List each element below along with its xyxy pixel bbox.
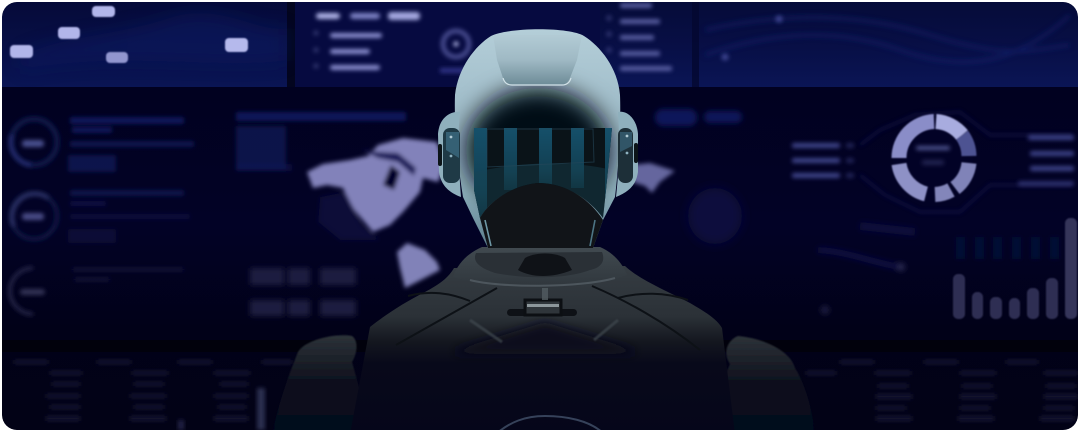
panel: left stat rings and text lines bbox=[10, 117, 194, 314]
panel: map caption lines bbox=[236, 112, 406, 171]
chest buckle bbox=[507, 286, 577, 316]
panel: bottom-right bar chart bbox=[953, 218, 1077, 319]
panel: right donut chart bbox=[792, 112, 1074, 212]
robot: right ear pod bbox=[616, 112, 638, 197]
panel: top-left timeline screen bbox=[0, 0, 295, 87]
robot: lower back arc bbox=[500, 415, 601, 430]
robot: helmet shell bbox=[455, 29, 620, 248]
dial caption bbox=[440, 68, 470, 73]
text lines bbox=[68, 117, 194, 281]
dim globe bbox=[688, 188, 742, 244]
timeline markers bbox=[10, 6, 248, 63]
panel: bottom data table bbox=[0, 340, 1080, 430]
world map bbox=[307, 138, 675, 288]
robot: chin bbox=[480, 183, 603, 248]
helmet top panel bbox=[496, 48, 579, 84]
helmet inner shadow bbox=[466, 88, 610, 212]
dial icon bbox=[443, 31, 469, 57]
robot: left arm bbox=[274, 334, 358, 430]
donut right legend bbox=[1018, 135, 1074, 186]
robot: collar bbox=[453, 247, 627, 288]
stat ring 2 bbox=[11, 193, 57, 239]
panel: top-centre list screen bbox=[295, 0, 600, 87]
chest shadow bbox=[455, 322, 635, 354]
donut segments bbox=[899, 122, 969, 194]
stat ring 3 bbox=[10, 268, 45, 314]
robot: right arm bbox=[726, 336, 814, 430]
robot: left ear pod bbox=[438, 112, 461, 197]
robot: torso bbox=[364, 266, 728, 380]
dim map data rows bbox=[250, 268, 356, 316]
donut centre lines bbox=[916, 146, 950, 165]
panel: top-right chart screen bbox=[600, 0, 1080, 87]
small status pills bbox=[655, 109, 742, 126]
panel: lower dashboard wall bbox=[0, 87, 1080, 434]
stat ring 1 bbox=[11, 119, 57, 165]
donut left legend bbox=[792, 143, 854, 178]
panel: dim trend line bbox=[818, 226, 915, 314]
robot: visor with teal reflections bbox=[474, 128, 615, 248]
shoulder seams bbox=[396, 286, 700, 350]
chest highlights bbox=[470, 320, 618, 342]
